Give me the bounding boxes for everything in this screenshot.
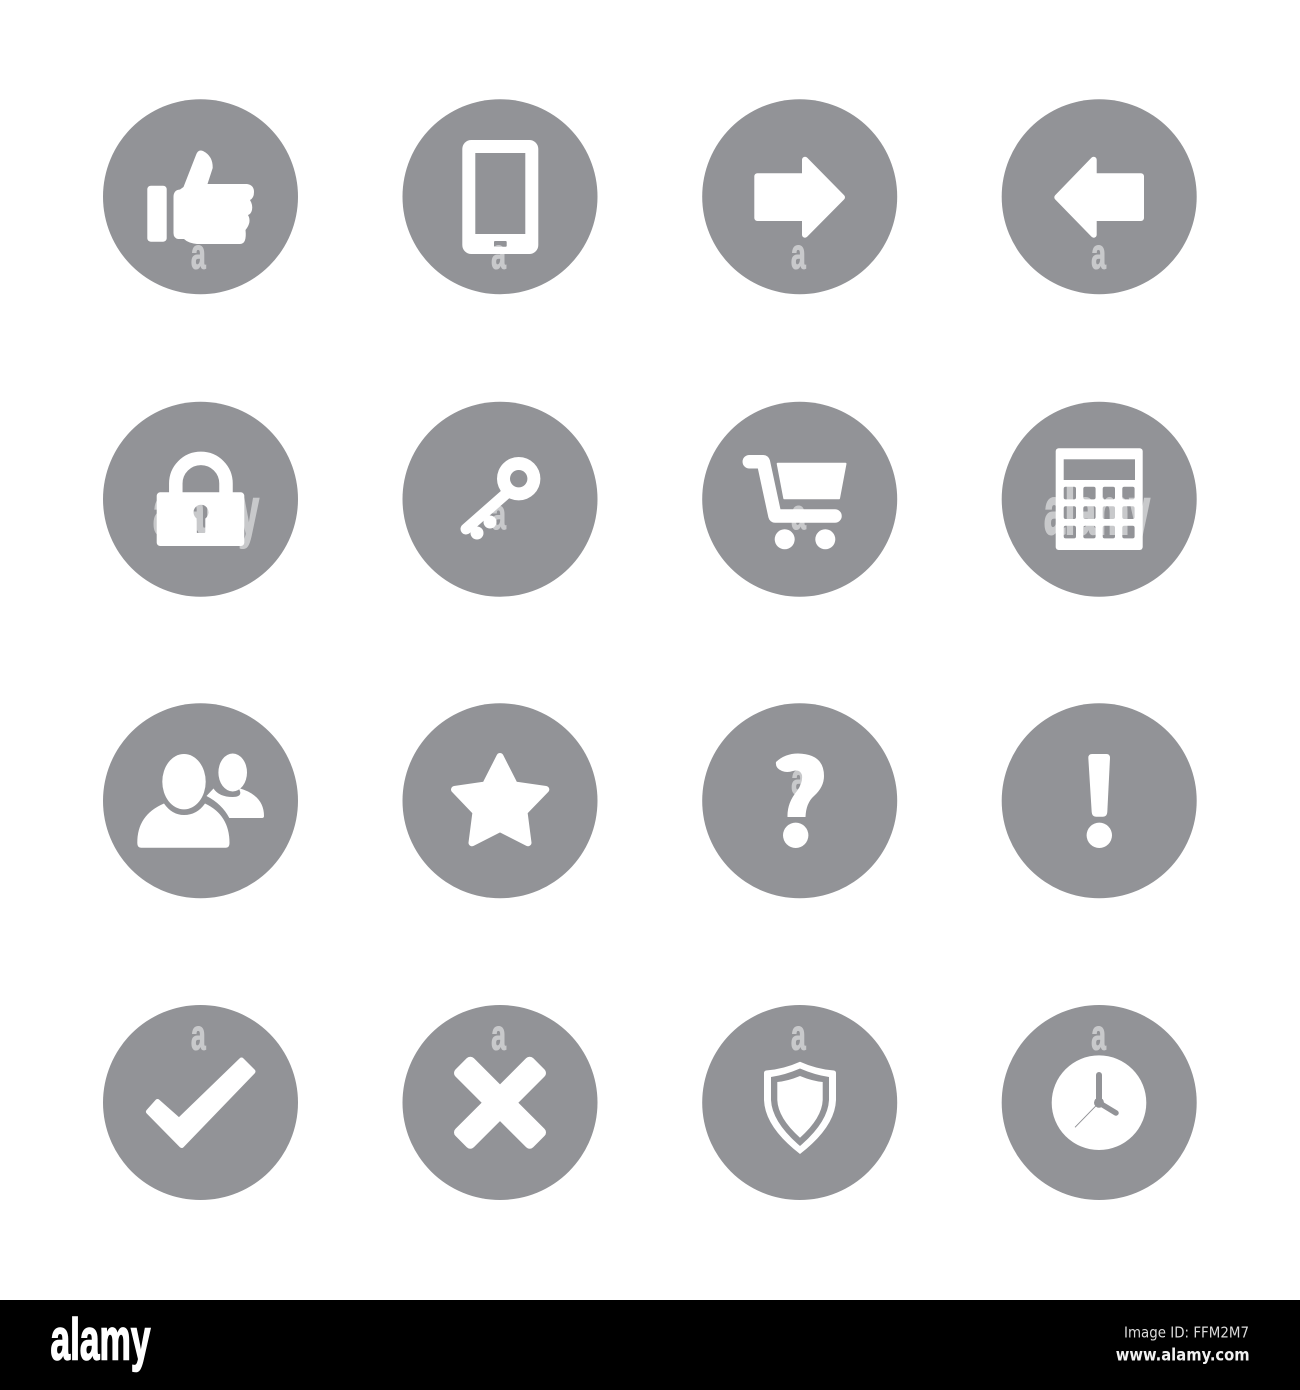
website url: www.alamy.com — [1116, 1346, 1250, 1365]
icon: question mark — [702, 703, 897, 898]
icon: check mark: a — [191, 1012, 206, 1060]
icon: user group — [103, 703, 298, 898]
icon: padlock: alamy — [153, 474, 259, 549]
icon: calculator — [1002, 402, 1197, 597]
icon: cross — [402, 1005, 598, 1200]
icon: clock: a — [1091, 1012, 1107, 1060]
icon: clock — [1002, 1005, 1197, 1200]
icon: cross: a — [491, 1012, 507, 1060]
footer logo: alamy — [50, 1308, 150, 1372]
icon: thumbs up: a — [191, 230, 206, 278]
icon: shopping cart — [702, 402, 897, 597]
icon: shield — [702, 1005, 897, 1200]
icon: left arrow: a — [1091, 230, 1107, 278]
icon: right arrow: a — [791, 230, 806, 278]
icon: shopping cart: a — [791, 491, 807, 539]
icon: key: a — [491, 491, 507, 539]
icon: smartphone: a — [491, 230, 507, 278]
icon: exclamation mark — [1002, 703, 1197, 898]
icon: calculator: alamy — [1044, 474, 1150, 549]
icon: star — [402, 703, 598, 898]
icon: padlock — [103, 402, 298, 597]
icon: check mark — [103, 1005, 298, 1200]
icon: key — [402, 402, 598, 597]
icon: right arrow — [702, 99, 897, 294]
icon: smartphone — [402, 99, 598, 294]
icon: thumbs up — [103, 99, 298, 294]
image id: Image ID: FFM2M7 — [1124, 1324, 1249, 1342]
footer bar — [0, 1300, 1300, 1390]
icon: shield: a — [791, 1012, 806, 1060]
icon: question mark: a — [791, 756, 807, 804]
icon: left arrow — [1002, 99, 1197, 294]
